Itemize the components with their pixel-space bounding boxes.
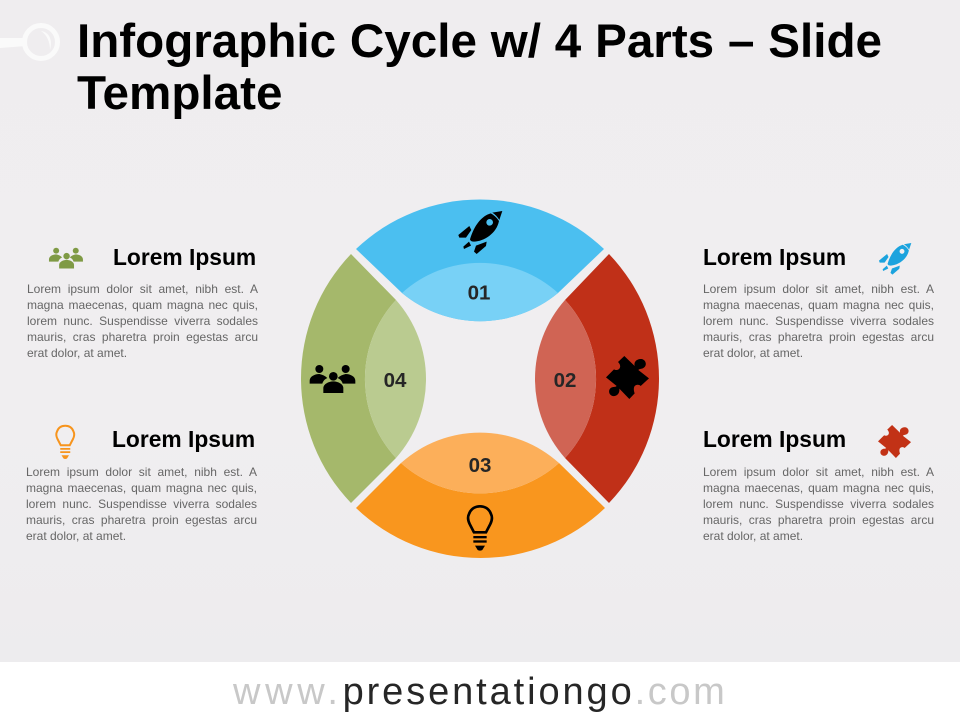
body text: erat dolor, at amet.	[27, 346, 127, 360]
panel: top left text	[27, 244, 258, 360]
segment 02: red: 02	[554, 369, 576, 392]
body text: erat dolor, at amet.	[703, 346, 803, 360]
body text	[703, 465, 934, 543]
panel: bottom right text	[703, 425, 934, 543]
segment 01: blue: 01	[468, 282, 490, 304]
body text: lorem nunc. Suspendisse viverra sodales	[703, 314, 934, 328]
body text	[26, 465, 257, 543]
heading: Lorem Ipsum	[113, 244, 256, 270]
heading: Lorem Ipsum	[703, 244, 846, 270]
segment 03: orange: 03	[469, 454, 491, 477]
segment 03: orange	[356, 433, 605, 558]
icon: light bulb	[468, 506, 492, 551]
icon: blue rocket	[879, 243, 912, 275]
body text: lorem nunc. Suspendisse viverra sodales	[26, 497, 257, 511]
icon: orange light bulb	[55, 424, 76, 459]
footer band	[0, 662, 960, 720]
panel: bottom left text	[26, 424, 257, 543]
segment 04: green: 04	[384, 369, 407, 392]
website url: www.presentationgo.com	[233, 671, 727, 713]
body text: Lorem ipsum dolor sit amet, nibh est. A	[26, 465, 257, 479]
body text: Lorem ipsum dolor sit amet, nibh est. A	[703, 465, 934, 479]
body text: erat dolor, at amet.	[703, 529, 803, 543]
segment 02: red	[535, 254, 659, 503]
body text: Lorem ipsum dolor sit amet, nibh est. A	[27, 282, 258, 296]
heading: Lorem Ipsum	[703, 426, 846, 452]
icon: green people	[48, 248, 83, 268]
body text: magna maecenas, quam magna nec quis,	[26, 481, 257, 495]
body text: lorem nunc. Suspendisse viverra sodales	[27, 314, 258, 328]
body text: mauris, cras pharetra proin egestas arcu	[703, 513, 934, 527]
body text: erat dolor, at amet.	[26, 529, 126, 543]
body text: magna maecenas, quam magna nec quis,	[27, 298, 258, 312]
segment 01: blue	[356, 199, 604, 321]
body text	[27, 282, 258, 360]
segment 04: green	[301, 254, 426, 503]
body text	[703, 282, 934, 360]
body text: lorem nunc. Suspendisse viverra sodales	[703, 497, 934, 511]
logo ring	[0, 23, 60, 61]
body text: mauris, cras pharetra proin egestas arcu	[27, 330, 258, 344]
icon: rocket	[458, 211, 502, 254]
icon: puzzle piece	[606, 356, 649, 399]
body text: Lorem ipsum dolor sit amet, nibh est. A	[703, 282, 934, 296]
body text: magna maecenas, quam magna nec quis,	[703, 298, 934, 312]
icon: people	[310, 365, 355, 393]
panel: top right text	[703, 243, 934, 360]
heading: Lorem Ipsum	[112, 426, 255, 452]
title	[77, 15, 882, 120]
body text: mauris, cras pharetra proin egestas arcu	[703, 330, 934, 344]
title: Infographic Cycle w/ 4 Parts – Slide	[77, 15, 882, 68]
icon: red puzzle piece	[878, 425, 911, 458]
title: Template	[77, 67, 282, 120]
body text: mauris, cras pharetra proin egestas arcu	[26, 513, 257, 527]
body text: magna maecenas, quam magna nec quis,	[703, 481, 934, 495]
